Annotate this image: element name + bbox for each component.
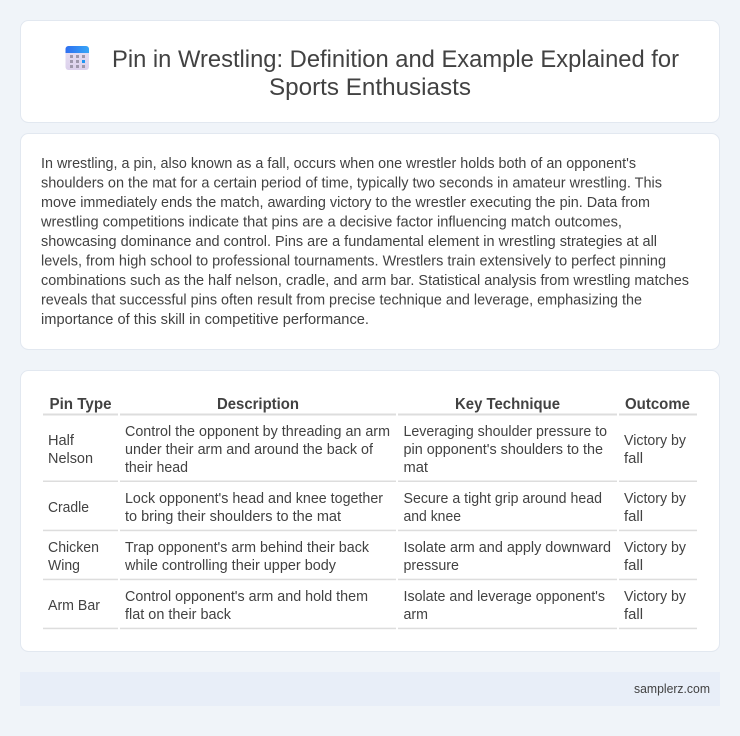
table row: Chicken Wing: pressure bbox=[404, 558, 459, 574]
table row: Cradle: Victory by bbox=[624, 491, 687, 507]
title bbox=[112, 46, 679, 101]
title: Pin in Wrestling: Definition and Example Explained for bbox=[112, 46, 679, 73]
table row: Half Nelson: their head bbox=[125, 460, 188, 476]
text block: intro: combinations such as the half nelson, cradle, and arm bar. Statistical analysis from wrestling matches bbox=[41, 273, 689, 289]
table row: Arm Bar: flat on their back bbox=[125, 607, 232, 623]
text block: intro: reveals that successful pins often result from precise technique and leverage, emphasizing the bbox=[41, 292, 642, 308]
table row: Arm Bar bbox=[48, 589, 687, 623]
table header row: Pin Type bbox=[50, 396, 112, 413]
table row: Arm Bar: Control opponent's arm and hold them bbox=[125, 589, 368, 605]
table row: Half Nelson: Leveraging shoulder pressure to bbox=[404, 424, 607, 440]
table row: Half Nelson: Victory by bbox=[624, 433, 687, 449]
text block: intro: showcasing dominance and control. Pins are a fundamental element in wrestling strategies at all bbox=[41, 234, 657, 250]
table header row: Outcome bbox=[625, 396, 690, 413]
table row: Arm Bar: arm bbox=[404, 607, 428, 623]
table row: Arm Bar: Victory by bbox=[624, 589, 687, 605]
table row: Chicken Wing: fall bbox=[624, 558, 643, 574]
table row: Chicken Wing: Trap opponent's arm behind their back bbox=[125, 540, 370, 556]
footer bar bbox=[20, 672, 720, 706]
panel: intro paragraph bbox=[20, 134, 720, 350]
table row: Chicken Wing: Isolate arm and apply downward bbox=[404, 540, 611, 556]
table row: Chicken Wing: Chicken bbox=[48, 540, 99, 556]
table row: Half Nelson: mat bbox=[404, 460, 428, 476]
icon: calendar bbox=[66, 46, 89, 70]
table header row: Description bbox=[217, 396, 299, 413]
table header row bbox=[50, 396, 690, 413]
title: Sports Enthusiasts bbox=[269, 74, 471, 101]
table row: Arm Bar: fall bbox=[624, 607, 643, 623]
panel: table bbox=[20, 370, 720, 652]
table row: Cradle: Cradle bbox=[48, 500, 89, 516]
table row: Cradle: fall bbox=[624, 509, 643, 525]
table row: Half Nelson: Half bbox=[48, 433, 75, 449]
table header row: Key Technique bbox=[455, 396, 560, 413]
table row: Cradle: Lock opponent's head and knee together bbox=[125, 491, 383, 507]
table row: Half Nelson: Control the opponent by threading an arm bbox=[125, 424, 390, 440]
table row: Arm Bar: Isolate and leverage opponent's bbox=[404, 589, 605, 605]
text block: intro: In wrestling, a pin, also known as a fall, occurs when one wrestler holds both of an opponent's bbox=[41, 156, 636, 172]
table row: Half Nelson: under their arm and around the back of bbox=[125, 442, 374, 458]
table row: Cradle: and knee bbox=[404, 509, 461, 525]
text block: intro bbox=[40, 156, 689, 328]
text block: intro: shoulders on the mat for a certain period of time, typically two seconds in amateur wrestling. This bbox=[41, 176, 662, 192]
footer text: samplerz.com bbox=[634, 681, 710, 696]
table row: Cradle: Secure a tight grip around head bbox=[404, 491, 602, 507]
table row: Chicken Wing bbox=[48, 540, 687, 574]
text block: intro: wrestling competitions indicate that pins are a decisive factor influencing match outcomes, bbox=[40, 214, 622, 230]
table row: Chicken Wing: Wing bbox=[48, 558, 80, 574]
text block: intro: importance of this skill in competitive performance. bbox=[41, 312, 369, 328]
text block: intro: move immediately ends the match, awarding victory to the wrestler executing the pin. Data from bbox=[41, 195, 650, 211]
table row: Chicken Wing: Victory by bbox=[624, 540, 687, 556]
table row: Cradle: to bring their shoulders to the mat bbox=[125, 509, 341, 525]
table row: Half Nelson: pin opponent's shoulders to the bbox=[404, 442, 603, 458]
table row: Chicken Wing: while controlling their upper body bbox=[124, 558, 337, 574]
table row: Half Nelson: Nelson bbox=[48, 451, 93, 467]
header panel bbox=[20, 20, 720, 122]
table row: Half Nelson bbox=[48, 424, 687, 476]
table row: Half Nelson: fall bbox=[624, 451, 643, 467]
table row: Arm Bar: Arm Bar bbox=[48, 598, 100, 614]
table row: Cradle bbox=[48, 491, 687, 525]
text block: intro: levels, from high school to professional tournaments. Wrestlers train extensively to perfect pinning bbox=[41, 254, 666, 270]
